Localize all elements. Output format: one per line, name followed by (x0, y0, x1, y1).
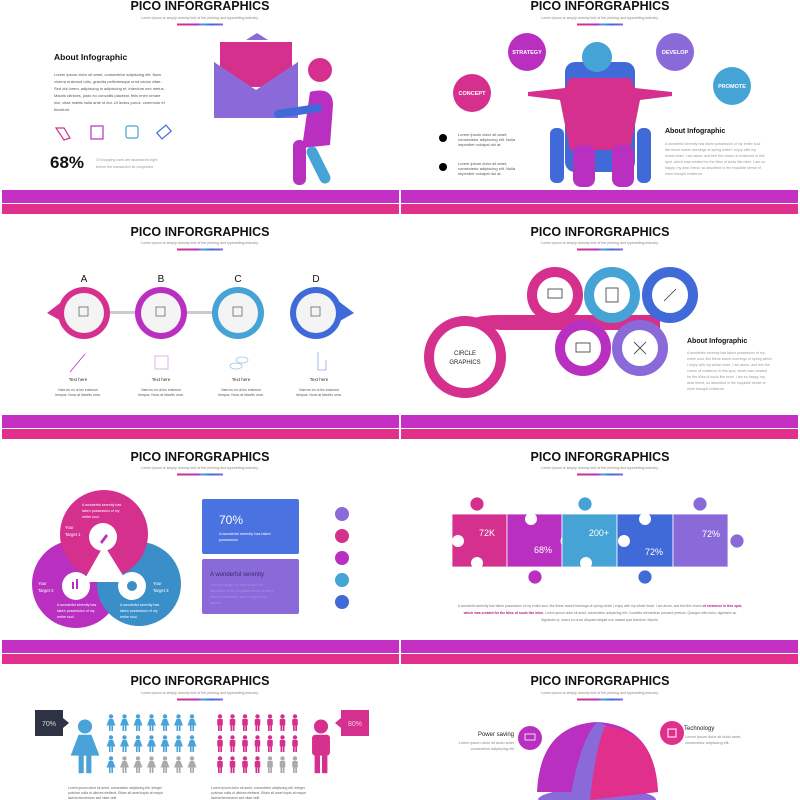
step texts: Text here (152, 377, 171, 382)
bubbles: CONCEPT (459, 91, 486, 97)
venn text: A wonderful serenity has (82, 503, 121, 507)
venn text: entire soul. (82, 515, 100, 519)
venn text: taken possession of my (57, 609, 95, 613)
box: 70%: 70% (219, 513, 243, 527)
circle labels/icons: GRAPHICS (449, 360, 481, 366)
about text: charm of existence in this spot, which was created (687, 369, 767, 373)
about text: happy, my dear friend, so absorbed in the exquisite sense of (665, 166, 761, 170)
step texts: Text here (310, 377, 329, 382)
bullets: consectetur adipiscing elit. Nulla (458, 166, 516, 171)
step texts: tempus. Nunc at lobortis urna. (138, 393, 184, 397)
step texts: tempus. Nunc at lobortis urna. (55, 393, 101, 397)
title: PICO INFORGRAPHICS (531, 674, 669, 688)
step letters: C (234, 274, 242, 285)
title: Lorem ipsum is simply dummy text of the printing and typesetting industry. (141, 691, 259, 695)
illustration: envelope carrier (214, 33, 333, 185)
venn text: Your (153, 581, 162, 586)
puzzle values: 72% (645, 547, 663, 557)
heading: about: About Infographic (54, 52, 127, 62)
puzzle values: 72K (479, 528, 495, 538)
label: power saving: consectetur adipiscing elit. (470, 747, 515, 751)
circle labels/icons: CIRCLE (454, 351, 476, 357)
man grid (217, 714, 298, 773)
callout 70% (35, 710, 69, 736)
box: serenity: I am so happy, my dear friend, so (210, 583, 263, 587)
woman grid (106, 714, 196, 773)
callout 80%: 80% (348, 721, 362, 728)
box: serenity: absorbed in the exquisite sense of mere (210, 589, 274, 593)
title: PICO INFORGRAPHICS (131, 674, 269, 688)
step texts: Nam eu ex ut leo euismod (221, 388, 261, 392)
caption: A wonderful serenity has taken possession of my entire soul, like these sweet mornings of spring which I enjoy with my whole heart. I am alone, and feel the charm of existence in this spot, (458, 604, 742, 608)
step texts: Text here (69, 377, 88, 382)
venn text: taken possession of my (82, 509, 120, 513)
captions: pulvinar nulla ut ultrices eleifend. Etiam sit amet turpis at neque (68, 791, 163, 795)
title: Lorem ipsum is simply dummy text of the printing and typesetting industry. (141, 466, 259, 470)
captions: Lorem ipsum dolor sit amet, consectetur adipiscing elit. Integer (68, 786, 163, 790)
venn text: Your (65, 525, 74, 530)
title: Lorem ipsum is simply dummy text of the printing and typesetting industry. (541, 466, 659, 470)
slide 4: circle graphics (429, 225, 772, 393)
title: Lorem ipsum is simply dummy text of the printing and typesetting industry. (541, 16, 659, 20)
box: serenity: talents. (210, 601, 222, 605)
text block (54, 72, 166, 112)
label: technology: consectetur adipiscing elit. (685, 741, 730, 745)
about text: mere tranquil existence. (665, 172, 703, 176)
bubbles: PROMOTE (718, 84, 746, 90)
title: PICO INFORGRAPHICS (531, 225, 669, 239)
bullets: Lorem ipsum dolor sit amet, (458, 132, 507, 137)
venn text: taken possession of my (120, 609, 158, 613)
venn text: entire soul. (57, 615, 75, 619)
about text: I enjoy with my whole heart. I am alone, and feel the (687, 363, 770, 367)
label: technology: Lorem ipsum dolor sit dudu amet, (685, 735, 741, 739)
venn circles (32, 490, 181, 628)
caption: which was created for the bliss of souls like mine. Lorem ipsum dolor sit amet, consectetur adipiscing elit. Curabitur elementum posuere pretium. Quisque nibh dolor, dignissim ac (463, 611, 737, 615)
venn text: Target 1 (65, 532, 81, 537)
puzzle values: 72% (702, 529, 720, 539)
text block: Mauris ultricies, justo eu convallis placerat, felis enim ornare (54, 93, 161, 98)
text block: Sed dui lorem, adipiscing in adipiscing et, interdum nec metus. (54, 86, 165, 91)
step texts: tempus. Nunc at lobortis urna. (218, 393, 264, 397)
box: serenity (202, 559, 299, 614)
stat 68%: before the transaction its completed. (96, 165, 154, 169)
about text: entire soul, like these sweet mornings of spring which (687, 357, 772, 361)
stat 68%: 68% (50, 153, 84, 172)
bubbles: DEVELOP (662, 50, 688, 56)
title: Lorem ipsum is simply dummy text of the printing and typesetting industry. (141, 241, 259, 245)
puzzle values: 68% (534, 545, 552, 555)
step letters: A (81, 274, 88, 285)
slide 5: targets (32, 450, 349, 628)
venn text: entire soul. (120, 615, 138, 619)
box: serenity: A wonderful serenity (210, 572, 264, 578)
title (531, 225, 669, 250)
venn text: Target 2 (38, 588, 54, 593)
slide 7: people (35, 674, 369, 800)
step texts: tempus. Nunc at lobortis urna. (296, 393, 342, 397)
text block: Lorem ipsum dolor sit amet, consectetur adipiscing elit. Nam (54, 72, 162, 77)
label: power saving: Power saving (478, 732, 514, 738)
about text (665, 128, 765, 176)
title: Lorem ipsum is simply dummy text of the printing and typesetting industry. (541, 691, 659, 695)
step texts: Nam eu ex ut leo euismod (299, 388, 339, 392)
title: PICO INFORGRAPHICS (531, 450, 669, 464)
step circles (47, 287, 354, 339)
about text: dear friend, so absorbed in the exquisite sense of (687, 381, 766, 385)
title (531, 0, 669, 26)
puzzle pieces (452, 497, 744, 584)
circle labels/icons (449, 288, 676, 366)
step texts: Text here (232, 377, 251, 382)
about text: spot, which was created for the bliss of souls like mine. I am so (665, 160, 765, 164)
title: PICO INFORGRAPHICS (131, 450, 269, 464)
captions: pulvinar nulla ut ultrices eleifend. Etiam sit amet turpis at neque (211, 791, 306, 795)
about text: About Infographic (687, 338, 747, 345)
icons row (56, 125, 171, 140)
title (131, 450, 269, 476)
bullets: consectetur adipiscing elit. Nulla (458, 137, 516, 142)
icon column (335, 507, 349, 609)
stat 68%: Of shopping carts are abandoned right (96, 158, 157, 162)
slide 6: puzzle (452, 450, 744, 622)
venn text: A wonderful serenity has (120, 603, 159, 607)
slide 3: ABCD steps (47, 225, 354, 397)
box: 70%: possession (219, 538, 238, 542)
about text (687, 338, 772, 391)
slide 8: hemisphere (459, 674, 741, 800)
captions: lacinia fermentum sed vitae velit. (68, 796, 117, 800)
label: power saving: Lorem ipsum dolor sit dudu amet, (459, 741, 515, 745)
label: technology: Technology (684, 726, 714, 732)
about text: About Infographic (665, 128, 725, 135)
box: serenity: tranquil existence, that I neglect my (210, 595, 267, 599)
big man (312, 719, 330, 773)
venn text (38, 503, 169, 619)
circles (429, 272, 693, 393)
big woman (71, 719, 99, 773)
venn text: Your (38, 581, 47, 586)
about text: for the bliss of souls like mine. I am so happy, my (687, 375, 765, 379)
puzzle values (479, 528, 720, 557)
caption (458, 604, 742, 622)
title (131, 674, 269, 700)
text block: tincidunt. (54, 107, 70, 112)
about text: A wonderful serenity has taken possession of my (687, 351, 765, 355)
step texts (55, 377, 342, 397)
divider bars (2, 190, 798, 664)
connector band (465, 315, 660, 330)
label: technology (660, 721, 741, 745)
box: 70%: A wonderful serenity has taken (219, 532, 271, 536)
text block: nisi, vitae mattis nulla ante id dui. Ut lectus purus, commodo et (54, 100, 166, 105)
illustration: person in chair (528, 42, 672, 187)
text block: viverra euismod odio, gravida pellentesque urna varius vitae. (54, 79, 162, 84)
title (531, 450, 669, 476)
venn text: Target 3 (153, 588, 169, 593)
step letters: D (312, 274, 320, 285)
step letters: B (158, 274, 165, 285)
about text: like these sweet mornings of spring which I enjoy with my (665, 148, 756, 152)
bullets: Lorem ipsum dolor sit amet, (458, 161, 507, 166)
bullets: imperdiet volutpat dui at (458, 142, 501, 147)
bullets (439, 132, 516, 176)
stat 68% (50, 153, 157, 172)
title (531, 674, 669, 700)
callout 80% (335, 710, 369, 736)
caption: dignissim ut, luctus eu urna. Aliquam aliquet non massa quis tincidunt. Mauris. (541, 618, 659, 622)
captions (68, 786, 306, 800)
captions: Lorem ipsum dolor sit amet, consectetur adipiscing elit. Integer (211, 786, 306, 790)
title: Lorem ipsum is simply dummy text of the printing and typesetting industry. (141, 16, 259, 20)
step texts: Nam eu ex ut leo euismod (58, 388, 98, 392)
callout 70%: 70% (42, 721, 56, 728)
step letters (81, 274, 320, 285)
about text: mere tranquil existence. (687, 387, 725, 391)
small icons (70, 352, 326, 372)
title: PICO INFORGRAPHICS (131, 225, 269, 239)
label: power saving (459, 726, 542, 751)
hemisphere chart (537, 722, 658, 800)
puzzle values: 200+ (589, 528, 609, 538)
title (131, 0, 269, 26)
title: Lorem ipsum is simply dummy text of the printing and typesetting industry. (541, 241, 659, 245)
slide 1: envelope (50, 0, 333, 185)
about text: whole heart. I am alone, and feel the charm of existence in this (665, 154, 765, 158)
venn text: A wonderful serenity has (57, 603, 96, 607)
box: 70% (202, 499, 299, 554)
title (131, 225, 269, 250)
bubbles (453, 33, 751, 112)
captions: lacinia fermentum sed vitae velit. (211, 796, 260, 800)
about text: A wonderful serenity has taken possession of my entire soul (665, 142, 760, 146)
bullets: imperdiet volutpat dui at (458, 171, 501, 176)
step texts: Nam eu ex ut leo euismod (141, 388, 181, 392)
slide 2: chair (439, 0, 765, 187)
bubbles: STRATEGY (512, 50, 542, 56)
